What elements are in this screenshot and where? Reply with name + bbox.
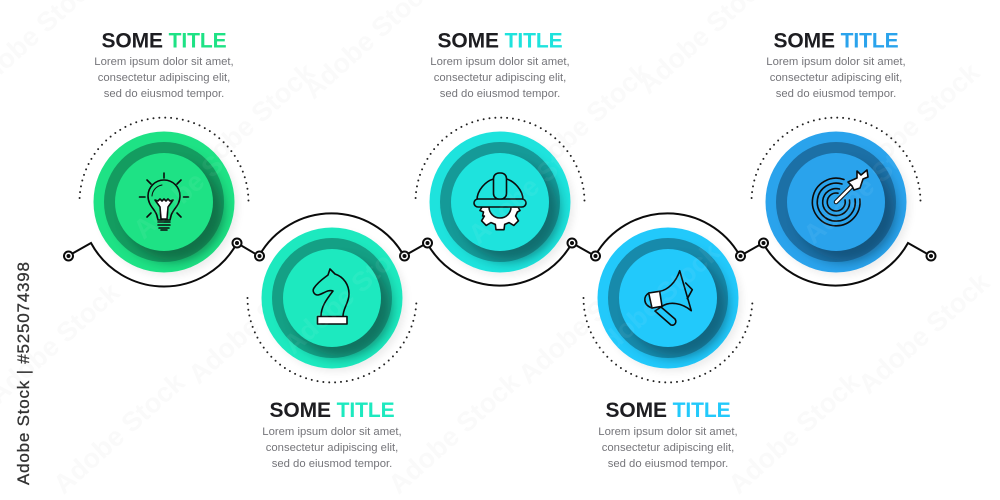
watermark overlay on circles: Adobe Stock [463, 116, 606, 250]
text block: step 1: SOME TITLE [101, 30, 227, 52]
text block: step 3: sed do eiusmod tempor. [440, 88, 560, 100]
watermark background: Adobe Stock [183, 256, 326, 390]
text block: step 5: sed do eiusmod tempor. [776, 88, 896, 100]
text block: step 4 [598, 399, 738, 470]
text block: step 5: Lorem ipsum dolor sit amet, [766, 56, 906, 68]
watermark background: Adobe Stock [48, 366, 191, 500]
text block: step 1: Lorem ipsum dolor sit amet, [94, 56, 234, 68]
text block: step 3: Lorem ipsum dolor sit amet, [430, 56, 570, 68]
watermark background: Adobe Stock [513, 56, 656, 190]
step 4: sky-blue circle with megaphone [598, 228, 742, 372]
icon: megaphone [645, 271, 692, 325]
step 1: green circle with lightbulb [94, 132, 238, 276]
watermark background: Adobe Stock [513, 256, 656, 390]
text block: step 2: sed do eiusmod tempor. [272, 458, 392, 470]
text block: step 2: SOME TITLE [269, 399, 395, 422]
watermark overlay on circles: Adobe Stock [583, 236, 726, 370]
text block: step 2: consectetur adipiscing elit, [266, 442, 398, 454]
watermark background: Adobe Stock [178, 56, 321, 190]
watermark background: Adobe Stock [723, 366, 866, 500]
text block: step 4: consectetur adipiscing elit, [602, 442, 734, 454]
text block: step 3: consectetur adipiscing elit, [434, 72, 566, 84]
watermark overlay on circles [128, 111, 941, 370]
watermark background: Adobe Stock [853, 266, 996, 400]
step 3: cyan circle with helmet and gear [430, 132, 574, 276]
text block: step 1: consectetur adipiscing elit, [98, 72, 230, 84]
watermark background: Adobe Stock [843, 56, 986, 190]
text block: step 3 [430, 30, 570, 100]
icon: target with arrow [812, 170, 868, 226]
watermark background: Adobe Stock [383, 366, 526, 500]
step 2: teal-green circle with chess knight [262, 228, 406, 372]
text block: step 4: SOME TITLE [605, 399, 731, 422]
icon: chess knight [313, 269, 349, 324]
text block: step 5 [766, 30, 906, 100]
icon: lightbulb [140, 173, 188, 230]
watermark overlay on circles: Adobe Stock [278, 226, 421, 360]
text block: step 2 [262, 399, 402, 470]
text block: step 4: sed do eiusmod tempor. [608, 458, 728, 470]
text block: step 4: Lorem ipsum dolor sit amet, [598, 426, 738, 438]
watermark overlay on circles: Adobe Stock [798, 116, 941, 250]
timeline nodes [64, 238, 936, 260]
step 5: blue circle with target [766, 132, 910, 276]
text block: step 1: sed do eiusmod tempor. [104, 88, 224, 100]
text block: step 3: SOME TITLE [437, 30, 563, 52]
connecting timeline [68, 213, 931, 287]
text block: step 5: SOME TITLE [773, 30, 899, 52]
text block: step 1 [94, 30, 234, 100]
dotted arcs [80, 118, 921, 382]
icon: helmet and gear [474, 173, 526, 230]
watermark overlay on circles: Adobe Stock [128, 111, 271, 245]
text block: step 2: Lorem ipsum dolor sit amet, [262, 426, 402, 438]
text block: step 5: consectetur adipiscing elit, [770, 72, 902, 84]
stock id side label: Adobe Stock | #525074398 [14, 262, 33, 485]
